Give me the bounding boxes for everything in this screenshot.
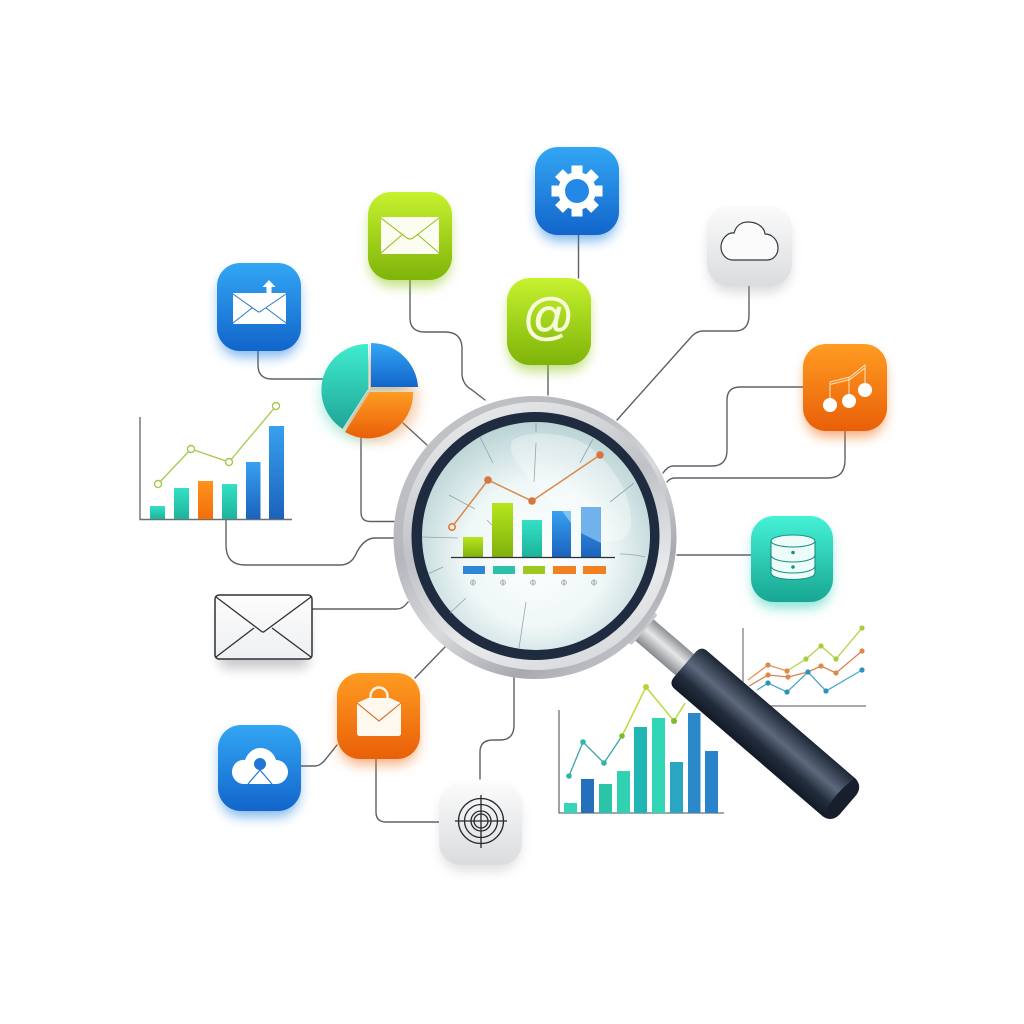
icon: outgoing mail tile <box>217 263 301 357</box>
icon: gear tile <box>535 147 619 241</box>
lens line chart <box>449 451 604 530</box>
icon: target tile <box>439 783 522 871</box>
lens legend: ф <box>470 580 476 586</box>
handle <box>619 603 864 824</box>
icon: cloud tile <box>707 206 792 292</box>
icon: music nodes tile <box>803 344 887 437</box>
top right multi-line chart <box>743 625 866 706</box>
icon: shopping mail tile <box>337 673 420 765</box>
icon: database tile <box>751 516 833 608</box>
lens glare <box>511 434 631 541</box>
lens legend <box>463 566 606 586</box>
bottom right bar and line chart <box>559 684 724 813</box>
lens legend: ф <box>500 580 506 586</box>
magnifying glass <box>394 396 864 824</box>
icon: at sign tile <box>507 278 591 371</box>
icon: large envelope <box>215 595 312 668</box>
icon: at sign tile: @ <box>523 288 574 345</box>
lens rim <box>394 396 676 679</box>
lens legend: ф <box>561 580 567 586</box>
left bar and line chart <box>140 402 292 520</box>
icon: green mail tile <box>368 192 452 286</box>
connector lines <box>226 235 845 822</box>
lens crack lines <box>422 423 645 648</box>
lens legend: ф <box>530 580 536 586</box>
icon: cloud network tile <box>218 725 301 817</box>
lens bar chart <box>451 503 615 558</box>
pie chart <box>320 343 418 442</box>
lens glass <box>422 422 650 650</box>
lens legend: ф <box>591 580 597 586</box>
